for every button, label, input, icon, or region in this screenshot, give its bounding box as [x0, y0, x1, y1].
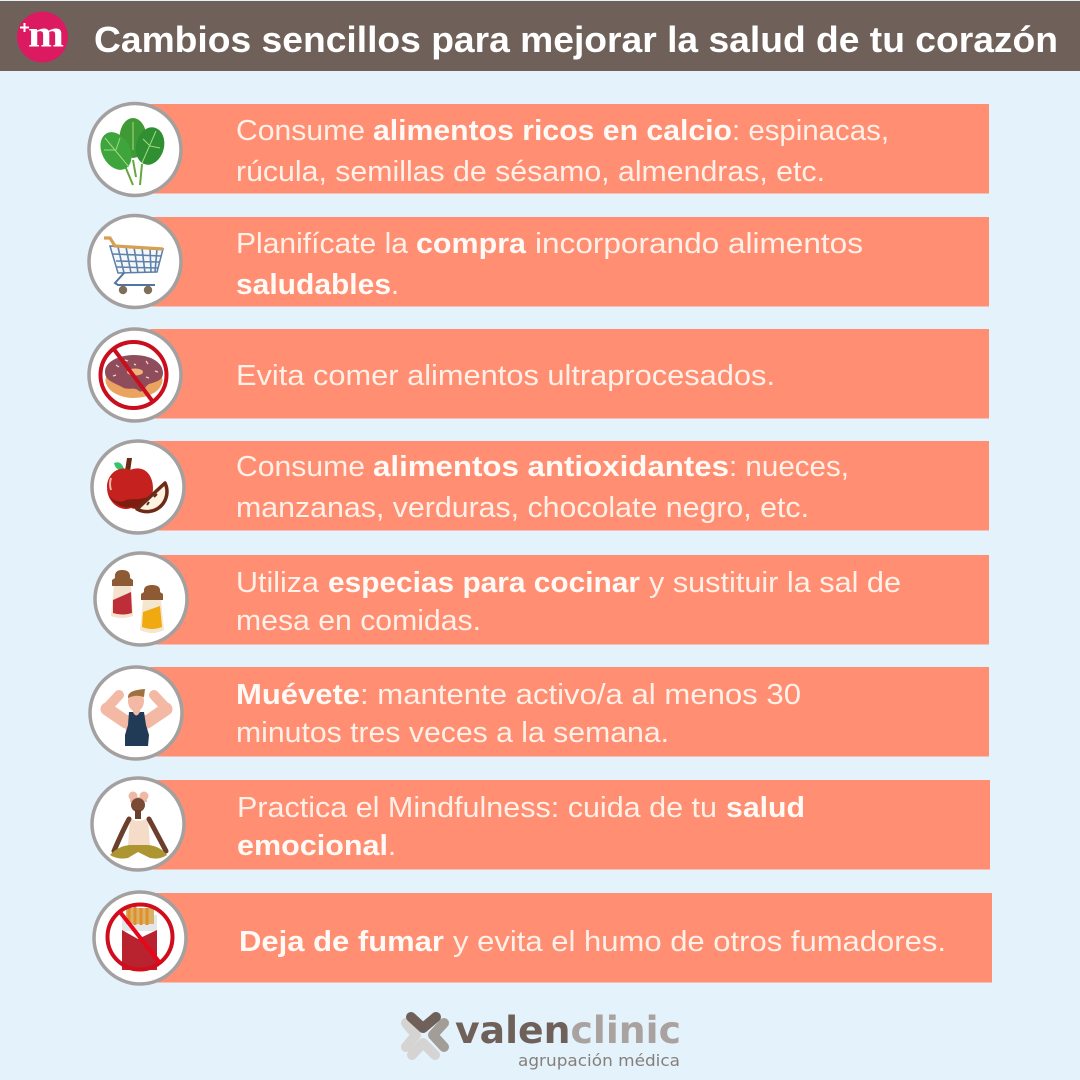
- panel: ultra-processed: [89, 329, 989, 421]
- panel: smoking: [94, 892, 992, 984]
- text: calcium foods: Consume: [236, 115, 365, 147]
- text: spices: especias para cocinar: [328, 567, 640, 599]
- text: shopping: incorporando alimentos: [535, 228, 863, 260]
- text: calcium foods: rúcula, semillas de sésamo, almendras, etc.: [236, 156, 825, 188]
- text: shopping: Planifícate la: [236, 228, 409, 260]
- text: exercise: [236, 679, 801, 749]
- text: shopping: [236, 228, 863, 301]
- logo: valenclinic: [406, 1009, 681, 1070]
- text: calcium foods: alimentos ricos en calcio: [373, 115, 732, 147]
- text: mindfulness: [237, 792, 805, 862]
- text: shopping: saludables: [236, 269, 391, 301]
- panel: calcium foods: [89, 104, 989, 196]
- text: antioxidants: Consume: [236, 451, 365, 483]
- text: spices: y sustituir la sal de: [649, 567, 901, 599]
- text: smoking: Deja de fumar: [239, 926, 444, 958]
- icon: plus-m logo: [17, 12, 68, 62]
- text: spices: [236, 567, 901, 637]
- text: exercise: Muévete: [236, 679, 360, 711]
- text: exercise: : mantente activo/a al menos 30: [360, 679, 801, 711]
- icon: plus-m logo: m: [28, 14, 64, 56]
- text: calcium foods: [236, 115, 889, 188]
- panel: antioxidants: [92, 441, 989, 533]
- text: mindfulness: emocional: [237, 830, 388, 862]
- text: shopping: .: [391, 269, 399, 301]
- icon: meditating woman: [110, 792, 167, 859]
- icon: spinach: [94, 118, 168, 185]
- title: Cambios sencillos para mejorar la salud de tu corazón: [94, 19, 1058, 60]
- icon: spice shakers: [111, 570, 164, 633]
- text: smoking: [239, 926, 946, 958]
- text: mindfulness: .: [388, 830, 396, 862]
- icon: apple: [107, 458, 167, 512]
- panel: shopping: [89, 216, 989, 308]
- icon: valenclinic heart mark: [406, 1017, 444, 1055]
- text: calcium foods: : espinacas,: [732, 115, 889, 147]
- text: agrupación médica: agrupación médica: [518, 1051, 680, 1070]
- text: antioxidants: [236, 451, 849, 524]
- icon: shopping cart: [104, 238, 163, 294]
- text: shopping: compra: [416, 228, 527, 260]
- panel: mindfulness: [92, 778, 990, 870]
- header band: [0, 1, 1080, 71]
- text: smoking: y evita el humo de otros fumadores.: [453, 926, 946, 958]
- panel: exercise: [90, 667, 989, 759]
- panel: spices: [95, 553, 989, 645]
- text: mindfulness: salud: [726, 792, 805, 824]
- text: exercise: minutos tres veces a la semana.: [236, 717, 669, 749]
- text: antioxidants: : nueces,: [729, 451, 849, 483]
- text: spices: Utiliza: [236, 567, 320, 599]
- icon: crossed donut: [100, 342, 166, 408]
- icon: muscular man: [107, 689, 166, 746]
- text: ultra-processed: Evita comer alimentos ultraprocesados.: [236, 360, 775, 392]
- text: mindfulness: Practica el Mindfulness: cuida de tu: [237, 792, 717, 824]
- text: antioxidants: alimentos antioxidantes: [373, 451, 729, 483]
- text: antioxidants: manzanas, verduras, chocolate negro, etc.: [236, 492, 809, 524]
- text: valenclinic wordmark: valenclinic: [455, 1009, 681, 1052]
- icon: crossed cigarette pack: [108, 904, 172, 970]
- text: spices: mesa en comidas.: [236, 605, 481, 637]
